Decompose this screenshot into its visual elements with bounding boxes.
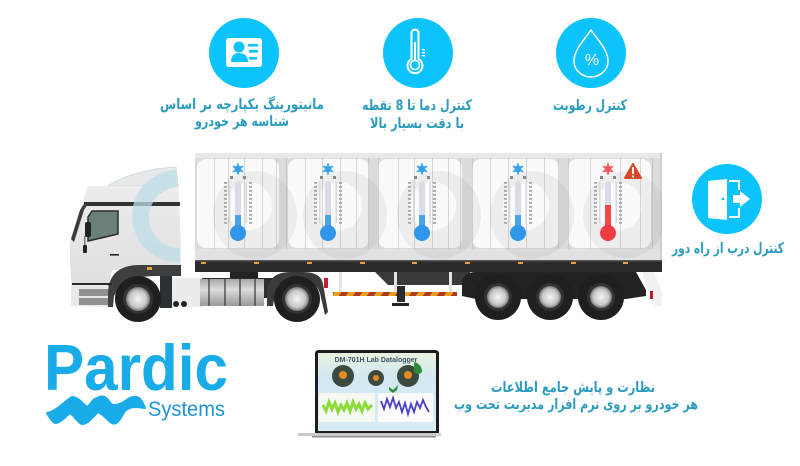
- heading: vehicle ID monitoring: مانیتورینگ یکپارچه بر اساس: [160, 95, 324, 113]
- logo waves: [47, 396, 145, 424]
- thermometer 3: [408, 164, 436, 241]
- dashboard gauges: [332, 362, 422, 393]
- heading: temperature control: با دقت بسیار بالا: [370, 116, 464, 132]
- dashboard title: DM-701H Lab Datalogger: [335, 357, 418, 364]
- tractor chassis and fuel tank: [172, 272, 328, 315]
- text: web software monitoring: نظارت و پایش جامع اطلاعات: [491, 380, 655, 396]
- cab watermark arc: [132, 170, 180, 262]
- truck illustration: [70, 153, 662, 322]
- dashboard blue chart: [378, 393, 433, 422]
- heading: temperature control: کنترل دما تا 8 نقطه: [362, 98, 472, 114]
- thermometer 4: [504, 164, 532, 241]
- heading: vehicle ID monitoring: [160, 95, 324, 130]
- text: web software monitoring: هر خودرو بر روی نرم افزار مدیریت تحت وب: [454, 397, 698, 413]
- trailer chassis band: [195, 260, 662, 272]
- text: web software monitoring: [454, 380, 698, 413]
- icon: driver identity card: [209, 18, 279, 88]
- heading: humidity control: کنترل رطوبت: [553, 98, 627, 114]
- landing gear and hazard bar: [333, 272, 470, 306]
- thermometer 5 (alarm): [594, 164, 622, 241]
- icon: thermometer: [383, 18, 453, 88]
- trailer container: [195, 153, 662, 260]
- icon: humidity drop: [556, 18, 626, 88]
- icon: warning triangle: [625, 164, 641, 178]
- logo: Pardic Systems: Systems: [148, 398, 225, 421]
- tractor wheels: [115, 276, 320, 322]
- cab spoiler: [108, 167, 178, 186]
- heading: vehicle ID monitoring: شناسه هر خودرو: [194, 114, 289, 130]
- heading: temperature control: [362, 98, 472, 132]
- icon: door remote control: [692, 164, 762, 234]
- icon: humidity drop: %: [585, 52, 599, 69]
- laptop with web dashboard: [298, 350, 441, 438]
- thermometer 2: [314, 164, 342, 241]
- tractor cab: [70, 170, 181, 308]
- trailer wheels: [462, 272, 662, 320]
- dashboard green chart: [319, 393, 375, 422]
- watermark rings: [213, 171, 662, 259]
- thermometer 1: [224, 164, 252, 241]
- logo: Pardic Systems: Pardic: [44, 331, 228, 404]
